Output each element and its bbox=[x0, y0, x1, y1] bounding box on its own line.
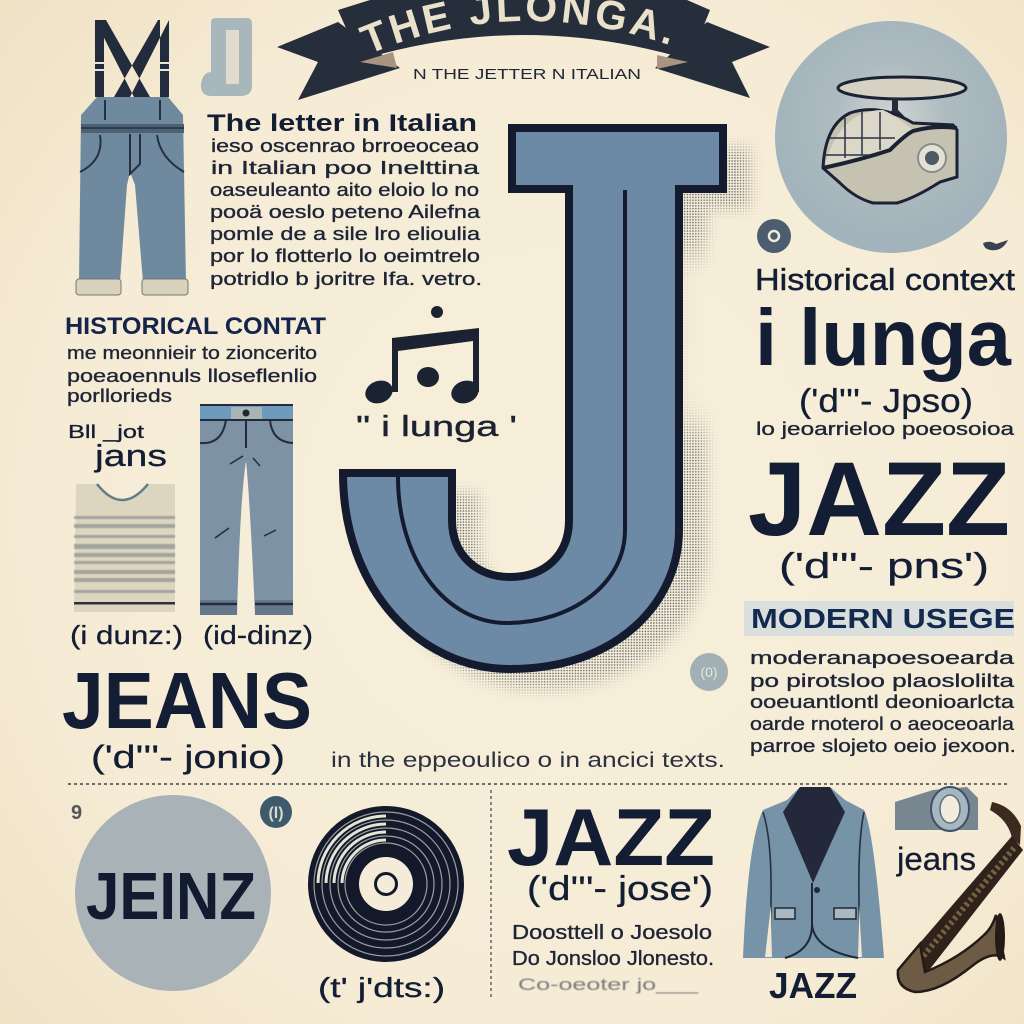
icon: striped shirt bbox=[74, 484, 175, 612]
pronunciation labels bbox=[70, 620, 313, 650]
big letter J bbox=[343, 128, 723, 669]
text line: lo jeoarrieloo poeosoioa bbox=[756, 418, 1015, 439]
icon: lens band bbox=[895, 787, 978, 831]
icon: small badge: (l) bbox=[268, 805, 284, 822]
text block: historical context left: porllorieds bbox=[67, 385, 172, 406]
circle: jeinz bbox=[75, 795, 271, 991]
icon: jeans bbox=[200, 405, 293, 615]
heading: historical contat: HISTORICAL CONTAT bbox=[65, 313, 326, 340]
text block: modern usage: ooeuantlontl deonioarlcta bbox=[750, 691, 1015, 712]
label: jazz under blazer: JAZZ bbox=[769, 965, 857, 1006]
icon: small dot: 9 bbox=[71, 802, 82, 824]
subtitle: N THE JETTER N ITALIAN bbox=[413, 67, 641, 83]
text block: historical context left: poeaoennuls lloseflenlio bbox=[67, 365, 317, 386]
text block: historical context left: me meonnieir to zioncerito bbox=[67, 342, 317, 363]
text block: modern usage: parroe slojeto oeio jexoon. bbox=[750, 735, 1016, 756]
text block: the letter in Italian: pooä oeslo peteno Ailefna bbox=[210, 201, 481, 222]
icon: suspender trousers bbox=[76, 20, 188, 295]
pronunciation: ('d'''- jonio) bbox=[91, 739, 285, 775]
pronunciation: ('d'''- jose') bbox=[527, 870, 713, 908]
icon: small badge bbox=[260, 796, 292, 828]
text block: jazz centre: Do Jonsloo Jlonesto. bbox=[512, 948, 714, 970]
heading: historical context: Historical context bbox=[755, 262, 1015, 297]
text block: the letter in Italian: oaseuleanto aito eloio lo no bbox=[210, 179, 479, 200]
text block: jazz centre bbox=[512, 922, 714, 994]
heading: jeans: JEANS bbox=[62, 656, 312, 745]
text block: the letter in Italian: por lo flotterlo lo oeimtrelo bbox=[210, 245, 480, 266]
text block: jazz centre: Doosttell o Joesolo bbox=[512, 922, 712, 944]
pronunciation: ('d'''- pns') bbox=[779, 545, 989, 586]
small label: jot: Bll _jot bbox=[68, 422, 144, 443]
text block: the letter in Italian: The letter in Italian bbox=[207, 110, 477, 137]
pronunciation: (t' j'dts:) bbox=[318, 972, 445, 1003]
heading: jazz right: JAZZ bbox=[748, 441, 1010, 558]
text block: jazz centre: Co-oeoter jo___ bbox=[518, 975, 699, 994]
pronunciation: ('d'''- Jpso) bbox=[799, 382, 973, 419]
icon: saxophone bbox=[898, 802, 1023, 992]
icon: small badge bbox=[690, 653, 728, 691]
pronunciation labels: (id-dinz) bbox=[203, 620, 313, 650]
label: i lunga: " i lunga ' bbox=[356, 411, 517, 443]
text block: modern usage: po pirotsloo plaoslolilta bbox=[750, 670, 1015, 691]
text block: the letter in Italian: potridlo b joritre Ifa. vetro. bbox=[210, 268, 482, 289]
icon: vinyl record bbox=[308, 806, 464, 962]
caption: in the eppeoulico o in ancici texts. bbox=[331, 749, 725, 772]
icon: globe hat in circle bbox=[775, 21, 1007, 253]
icon: small decoration bbox=[983, 240, 1008, 250]
icon: blazer bbox=[743, 787, 884, 958]
text block: the letter in Italian: ieso oscenrao brroeoceao bbox=[211, 135, 479, 156]
text block: modern usage: moderanapoesoearda bbox=[750, 647, 1015, 668]
text block: modern usage: oarde rnoterol o aeoceoarla bbox=[750, 713, 1015, 734]
circle: jeinz: JEINZ bbox=[86, 859, 256, 934]
icon: grey top hat shape bbox=[201, 18, 252, 96]
heading: modern usage: MODERN USEGE bbox=[751, 603, 1015, 634]
title banner bbox=[277, 0, 770, 100]
text block: the letter in Italian bbox=[207, 110, 482, 289]
heading: i lunga: i lunga bbox=[755, 293, 1011, 382]
label: jans: jans bbox=[94, 438, 167, 473]
label: jeans right: jeans bbox=[896, 841, 976, 877]
icon: small swirl badge bbox=[757, 219, 791, 253]
icon: music notes bbox=[362, 306, 482, 407]
stippled shadow of J bbox=[410, 138, 760, 699]
text block: the letter in Italian: pomle de a sile lro elioulia bbox=[210, 223, 481, 244]
heading: jazz centre: JAZZ bbox=[507, 793, 715, 883]
text block: the letter in Italian: in Italian poo Inelttina bbox=[211, 157, 480, 178]
text block: historical context left bbox=[67, 342, 317, 406]
pronunciation labels: (i dunz:) bbox=[70, 620, 183, 650]
text block: modern usage bbox=[750, 647, 1016, 756]
icon: small badge: (0) bbox=[700, 664, 718, 680]
